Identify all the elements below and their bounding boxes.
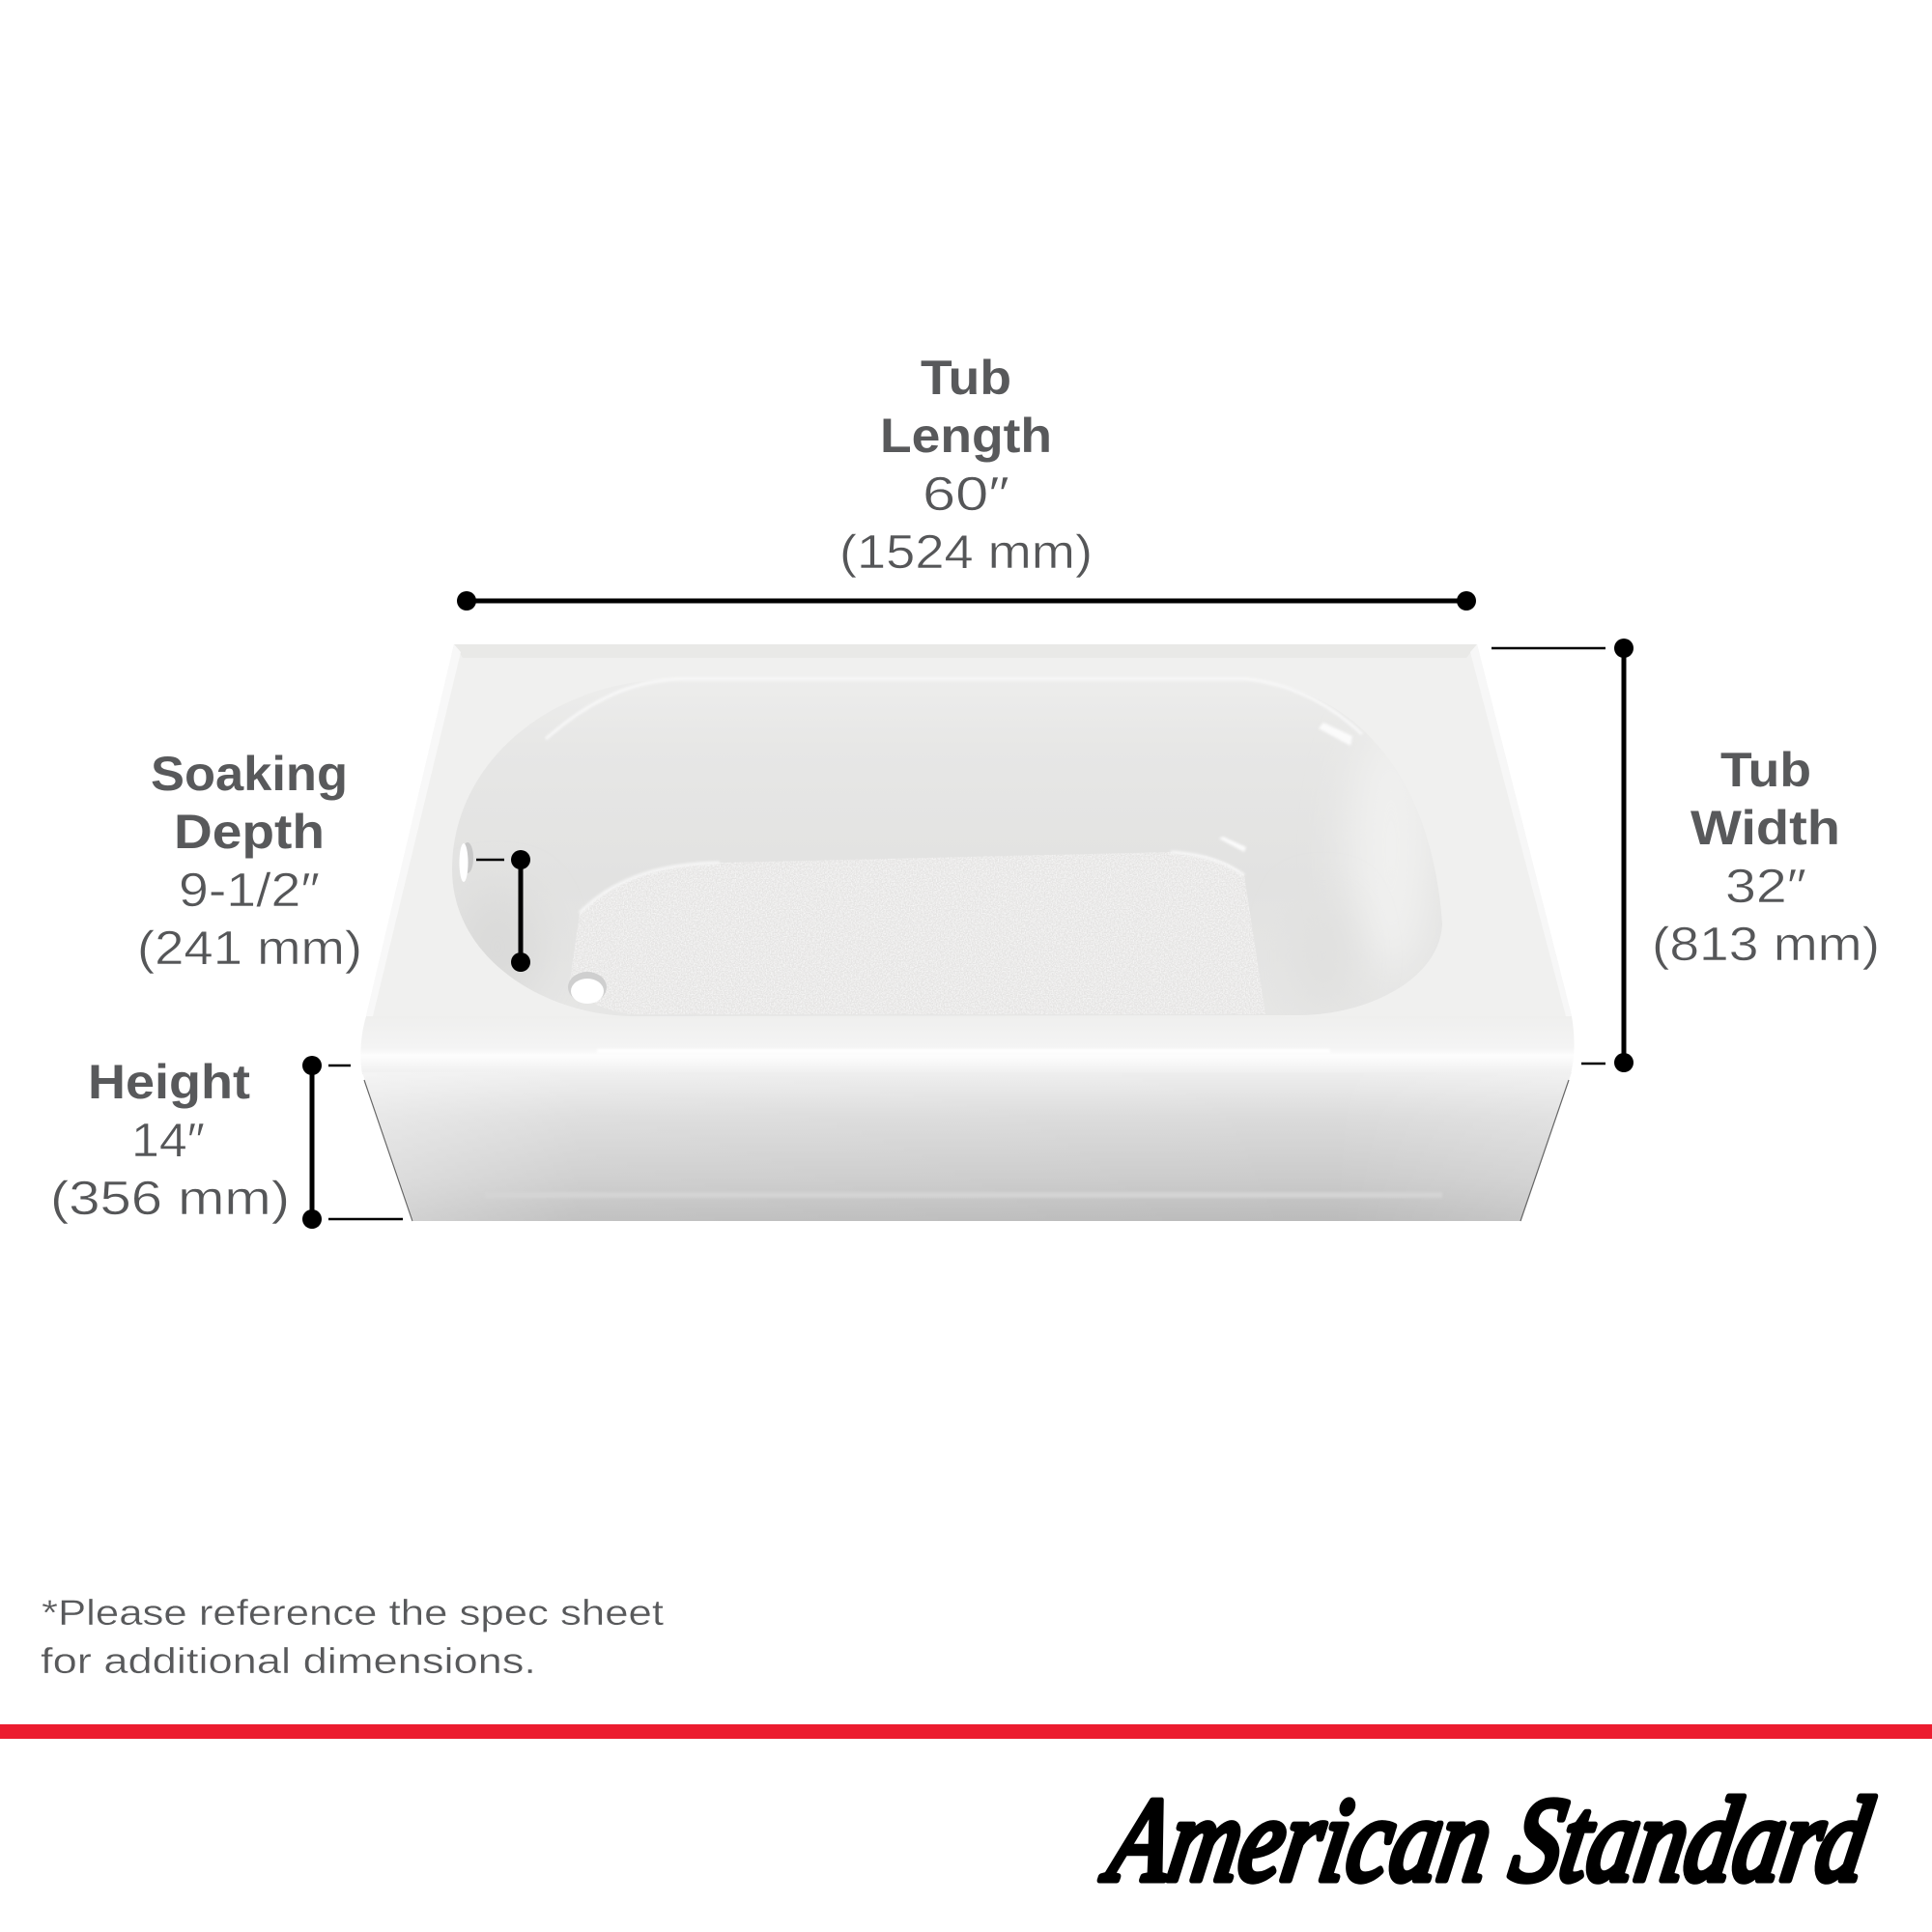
tub deck xyxy=(366,644,1572,1063)
bathtub illustration xyxy=(360,644,1575,1221)
dimension: tub width line xyxy=(1492,639,1634,1072)
drain ring xyxy=(568,972,607,1003)
label: tub width xyxy=(1652,743,1880,971)
dimension: height line xyxy=(302,1056,403,1229)
overflow hole xyxy=(460,842,473,882)
label: soaking depth: (241 mm) xyxy=(137,923,362,975)
label: tub length: Tub xyxy=(921,351,1011,405)
label: soaking depth: Depth xyxy=(174,805,325,859)
drain xyxy=(568,972,607,1004)
textured floor xyxy=(570,852,1265,1014)
left deck edge xyxy=(366,644,461,1016)
footnote: for additional dimensions. xyxy=(41,1641,536,1681)
front panel xyxy=(362,1072,1572,1221)
footnote xyxy=(41,1593,665,1681)
red divider bar xyxy=(0,1724,1932,1739)
label: tub width: Tub xyxy=(1720,743,1811,797)
drain opening xyxy=(571,979,604,1004)
overflow shadow xyxy=(462,842,473,873)
label: height: Height xyxy=(88,1055,250,1109)
overflow opening xyxy=(460,843,468,882)
label: soaking depth xyxy=(137,747,362,975)
left panel edge xyxy=(364,1080,412,1221)
rim specular line xyxy=(597,1049,1330,1053)
panel groove xyxy=(485,1192,1442,1198)
label: tub width: (813 mm) xyxy=(1652,919,1880,971)
right panel edge xyxy=(1520,1080,1569,1221)
label: height: 14″ xyxy=(131,1115,205,1167)
specular highlight lower right xyxy=(1219,837,1246,852)
label: tub length: Length xyxy=(880,409,1052,463)
floor highlight xyxy=(580,852,1244,913)
label: soaking depth: Soaking xyxy=(151,747,348,801)
label: tub width: 32″ xyxy=(1725,861,1806,913)
front panel highlight xyxy=(362,1072,1572,1221)
front rim xyxy=(360,1016,1575,1074)
label: tub length: 60″ xyxy=(923,469,1009,521)
bowl shading xyxy=(454,724,1435,1014)
label: tub length: (1524 mm) xyxy=(839,526,1093,579)
label: tub width: Width xyxy=(1690,801,1840,855)
label: tub length xyxy=(839,351,1093,579)
back lip of deck xyxy=(454,644,1477,658)
dimension: tub length line xyxy=(457,591,1476,611)
label: height: (356 mm) xyxy=(50,1173,290,1225)
footnote: *Please reference the spec sheet xyxy=(42,1593,665,1633)
bowl basin xyxy=(452,679,1442,1016)
specular highlight upper right xyxy=(1319,723,1352,746)
label: soaking depth: 9-1/2″ xyxy=(179,865,320,917)
bowl interior xyxy=(452,724,1442,1016)
dimension: soaking depth line xyxy=(476,850,530,972)
label: height xyxy=(50,1055,290,1225)
right deck edge xyxy=(1470,644,1572,1016)
rim highlight xyxy=(546,679,1362,739)
